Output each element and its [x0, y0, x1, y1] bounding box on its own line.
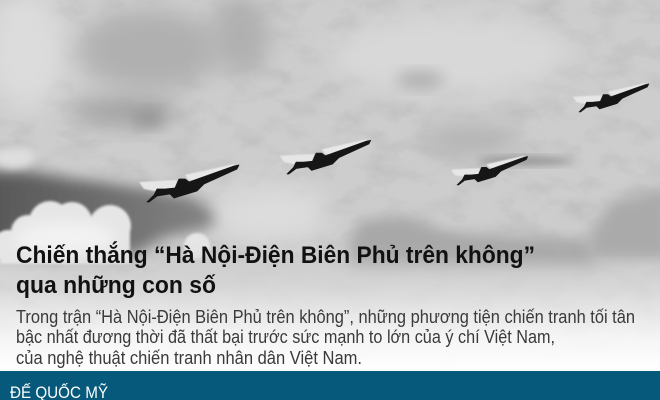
plane 2	[280, 139, 371, 174]
plane 1	[139, 164, 239, 202]
title: qua những con số	[16, 272, 216, 299]
title	[16, 241, 535, 299]
plane 4	[573, 83, 649, 112]
dark bank right	[350, 216, 593, 270]
intro text: bậc nhất đương thời đã thất bại trước sức mạnh to lớn của ý chí Việt Nam,	[16, 326, 555, 347]
dark cloud bank left	[0, 170, 215, 255]
white cumulus cloud	[0, 201, 210, 264]
intro text	[16, 306, 635, 368]
plane 3	[451, 156, 528, 185]
section bar: Đế quốc Mỹ	[0, 371, 660, 400]
intro text: của nghệ thuật chiến tranh nhân dân Việt Nam.	[16, 347, 362, 368]
title: Chiến thắng “Hà Nội-Điện Biên Phủ trên không”	[16, 241, 535, 269]
